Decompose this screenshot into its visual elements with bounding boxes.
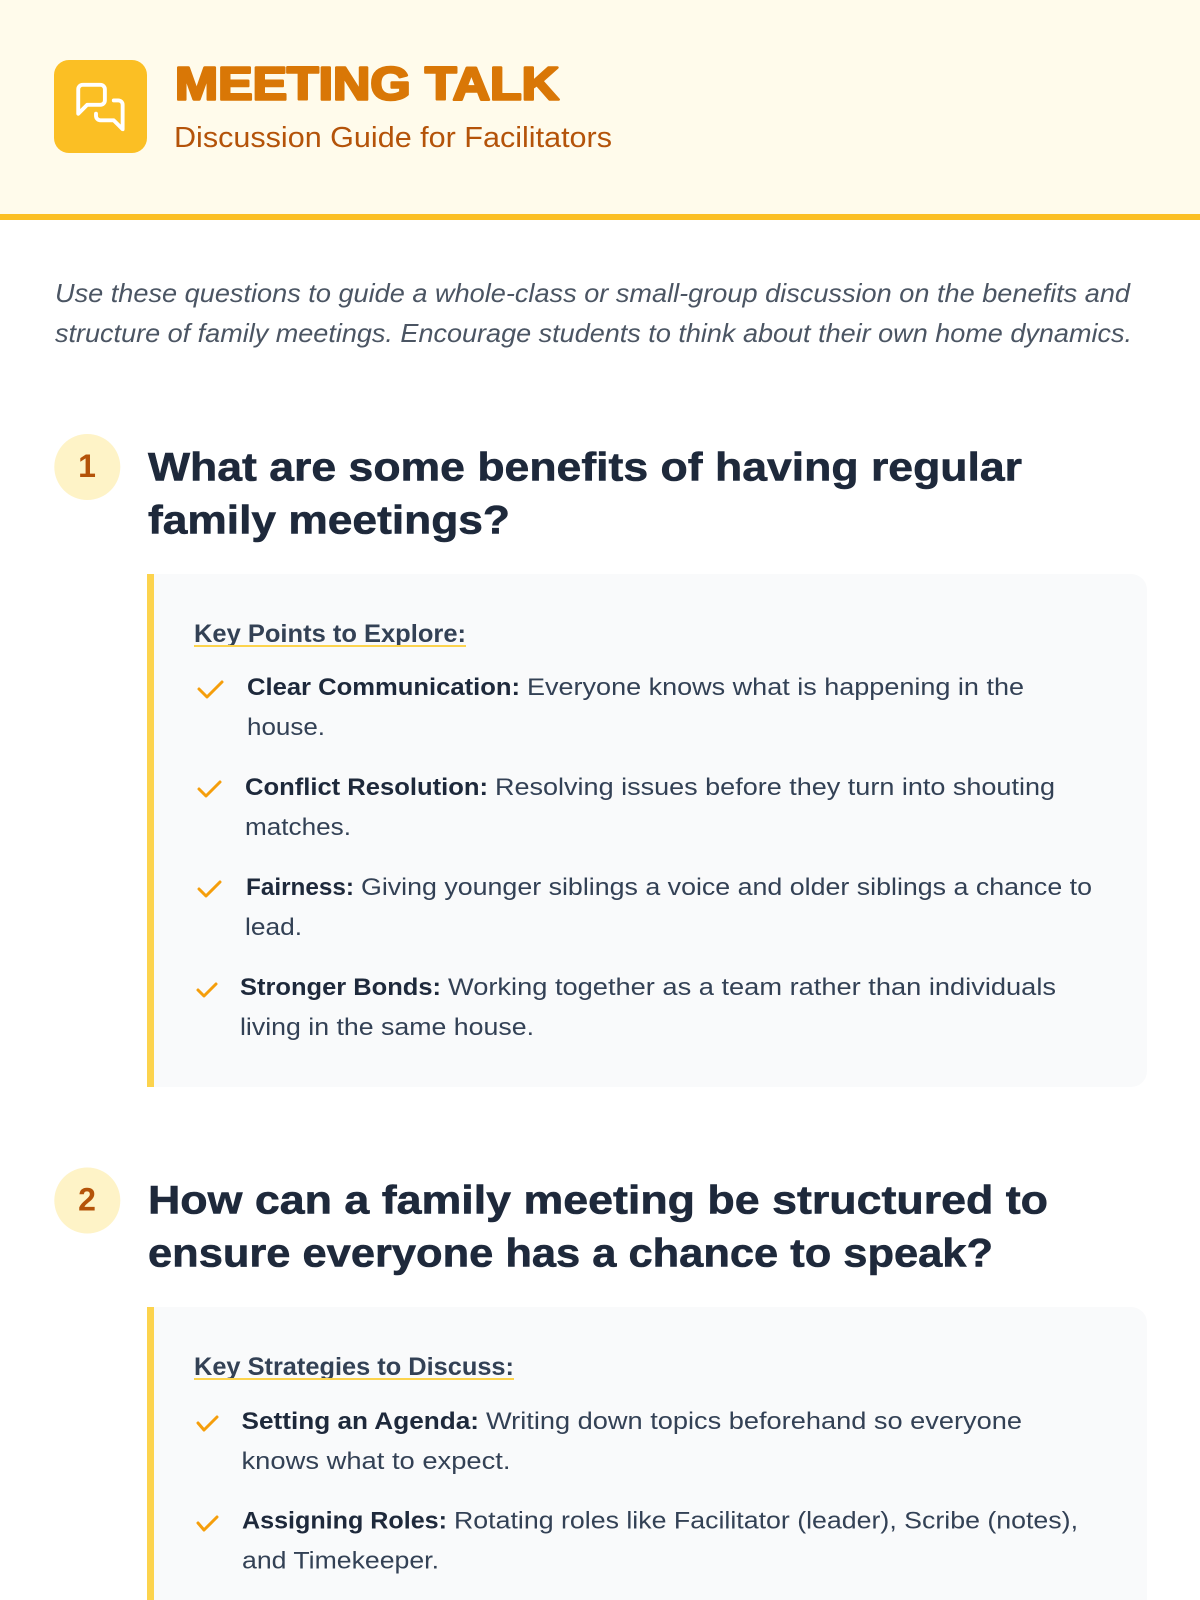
question 2 heading: [148, 1178, 1048, 1276]
item: fairness: Fairness:: [246, 874, 354, 901]
item: stronger bonds: living in the same house.: [240, 1014, 534, 1041]
item: fairness: Giving younger siblings a voice and older siblings a chance to: [361, 874, 1092, 901]
item: setting an agenda: knows what to expect.: [242, 1448, 510, 1475]
item: fairness: lead.: [245, 914, 302, 941]
item: setting an agenda: Setting an Agenda:: [242, 1408, 479, 1435]
item: stronger bonds: [198, 974, 1056, 1041]
subtitle: Discussion Guide for Facilitators: [174, 122, 612, 154]
item: setting an agenda: Writing down topics beforehand so everyone: [486, 1408, 1022, 1435]
question 1 heading: What are some benefits of having regular: [148, 446, 1022, 490]
intro text: Use these questions to guide a whole-class or small-group discussion on the benefits and: [55, 278, 1132, 308]
item: conflict resolution: Conflict Resolution:: [245, 774, 488, 801]
item: conflict resolution: matches.: [245, 814, 351, 841]
item: conflict resolution: Resolving issues before they turn into shouting: [495, 774, 1055, 801]
item: fairness: [199, 874, 1092, 941]
question 2 heading: ensure everyone has a chance to speak?: [148, 1232, 993, 1276]
question 1 heading: family meetings?: [148, 498, 510, 542]
header band: [0, 0, 1200, 220]
item: clear communication: Clear Communication:: [247, 674, 520, 701]
intro text: structure of family meetings. Encourage students to think about their own home dynamics.: [55, 318, 1132, 348]
icon: chat bubbles: [54, 60, 147, 153]
item: stronger bonds: Stronger Bonds:: [240, 974, 441, 1001]
item: assigning roles: and Timekeeper.: [242, 1548, 439, 1574]
item: setting an agenda: [198, 1408, 1022, 1475]
number badge 1: 1: [78, 448, 96, 484]
panel: key strategies: [147, 1307, 1147, 1600]
item: assigning roles: Rotating roles like Facilitator (leader), Scribe (notes),: [454, 1508, 1078, 1534]
item: clear communication: Everyone knows what is happening in the: [527, 674, 1024, 701]
item: clear communication: house.: [247, 714, 325, 741]
item: assigning roles: [198, 1508, 1078, 1574]
panel heading: key points: Key Points to Explore:: [194, 620, 466, 648]
question 2 heading: How can a family meeting be structured to: [148, 1178, 1048, 1222]
intro text: [55, 278, 1132, 348]
title: MEETING TALK: [175, 58, 559, 110]
panel: key points: [147, 574, 1147, 1087]
panel heading: key strategies: Key Strategies to Discuss:: [194, 1353, 514, 1381]
item: stronger bonds: Working together as a team rather than individuals: [448, 974, 1056, 1001]
number badge 2: 2: [78, 1182, 96, 1218]
item: assigning roles: Assigning Roles:: [242, 1508, 447, 1534]
number badge 1: [54, 434, 120, 500]
section 2: [54, 1168, 1147, 1600]
section 1: [54, 434, 1147, 1087]
number badge 2: [54, 1168, 120, 1234]
item: clear communication: [199, 674, 1024, 741]
item: conflict resolution: [199, 774, 1055, 841]
question 1 heading: [148, 446, 1022, 542]
